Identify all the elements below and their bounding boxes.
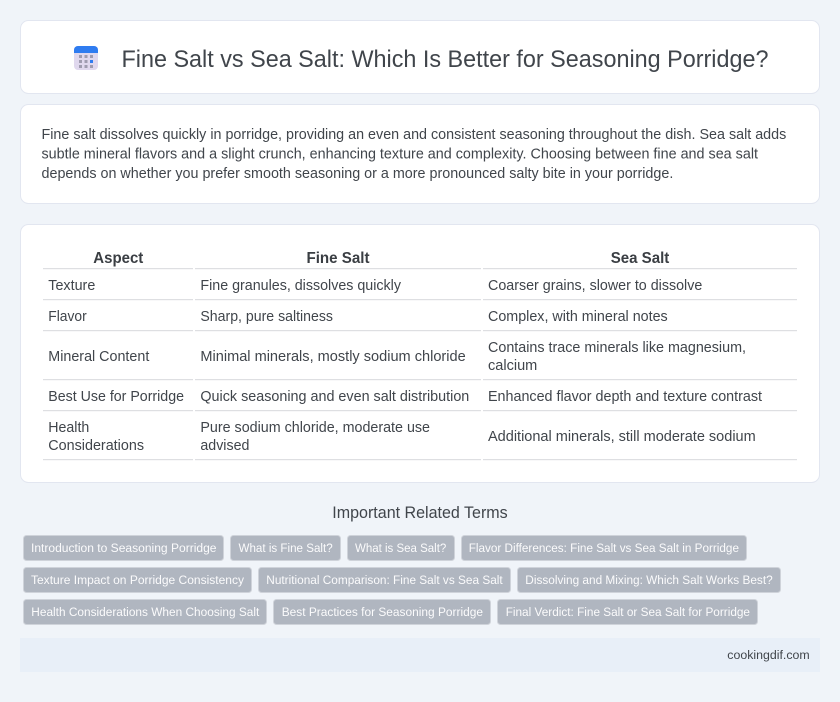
table row: mineral content: Contains trace minerals like magnesium, xyxy=(488,340,746,356)
table row: health considerations: Additional minerals, still moderate sodium xyxy=(488,429,756,445)
panel: comparison table xyxy=(20,224,820,482)
table row: health considerations: advised xyxy=(200,438,249,454)
related terms tags: Dissolving and Mixing: Which Salt Works Best? xyxy=(525,573,773,587)
table row: health considerations: Pure sodium chloride, moderate use xyxy=(200,420,430,436)
heading: important related terms: Important Related Terms xyxy=(332,504,508,522)
table row: texture xyxy=(48,278,702,294)
text block: introduction paragraph: subtle mineral flavors and a slight crunch, enhancing texture and complexity. Choosing between fine and sea salt xyxy=(42,147,758,163)
text block: introduction paragraph: Fine salt dissolves quickly in porridge, providing an even and consistent seasoning throughout the dish. Sea salt adds xyxy=(42,127,786,143)
table row: flavor xyxy=(48,309,668,325)
table row: flavor: Sharp, pure saltiness xyxy=(200,309,333,325)
footer bar xyxy=(20,638,820,672)
table header row: Fine Salt xyxy=(306,250,370,267)
table row: texture: Texture xyxy=(48,278,95,294)
table header row: Aspect xyxy=(93,250,144,267)
table row: best use for porridge xyxy=(48,389,762,405)
table row: mineral content: Minimal minerals, mostly sodium chloride xyxy=(200,349,466,365)
related terms tags: What is Sea Salt? xyxy=(355,541,446,555)
table row: health considerations: Health xyxy=(48,420,89,436)
table row: texture: Coarser grains, slower to dissolve xyxy=(488,278,702,294)
related terms tags: Flavor Differences: Fine Salt vs Sea Salt in Porridge xyxy=(469,541,739,555)
table row: health considerations: Considerations xyxy=(48,438,144,454)
related terms tags: Health Considerations When Choosing Salt xyxy=(31,605,260,619)
table row: texture: Fine granules, dissolves quickly xyxy=(200,278,402,294)
title: Fine Salt vs Sea Salt: Which Is Better for Seasoning Porridge? xyxy=(122,46,768,73)
table row: flavor: Complex, with mineral notes xyxy=(488,309,668,325)
table row: mineral content: calcium xyxy=(488,358,537,374)
table row: best use for porridge: Best Use for Porridge xyxy=(48,389,184,405)
related terms tags: Best Practices for Seasoning Porridge xyxy=(282,605,483,619)
panel: introduction xyxy=(20,104,820,204)
footer source text: cookingdif.com xyxy=(727,648,810,662)
text block: introduction paragraph xyxy=(42,127,786,182)
panel: title header xyxy=(20,20,820,94)
icon: calendar xyxy=(74,46,98,70)
table row: health considerations xyxy=(48,420,756,454)
related terms tags: Introduction to Seasoning Porridge xyxy=(31,541,217,555)
table row: flavor: Flavor xyxy=(48,309,87,325)
table row: best use for porridge: Quick seasoning and even salt distribution xyxy=(200,389,469,405)
text block: introduction paragraph: depends on whether you prefer smooth seasoning or a more pronounced salty bite in your porridge. xyxy=(42,166,673,182)
table header row: Sea Salt xyxy=(611,250,670,267)
related terms tags: Nutritional Comparison: Fine Salt vs Sea Salt xyxy=(266,573,503,587)
table row: mineral content: Mineral Content xyxy=(48,349,149,365)
related terms tags: Texture Impact on Porridge Consistency xyxy=(31,573,245,587)
table row: best use for porridge: Enhanced flavor depth and texture contrast xyxy=(488,389,762,405)
table row: mineral content xyxy=(48,340,746,374)
related terms tags: Final Verdict: Fine Salt or Sea Salt for Porridge xyxy=(506,605,750,619)
table header row xyxy=(93,250,670,267)
related terms tags: What is Fine Salt? xyxy=(238,541,333,555)
related terms tags xyxy=(24,536,780,624)
